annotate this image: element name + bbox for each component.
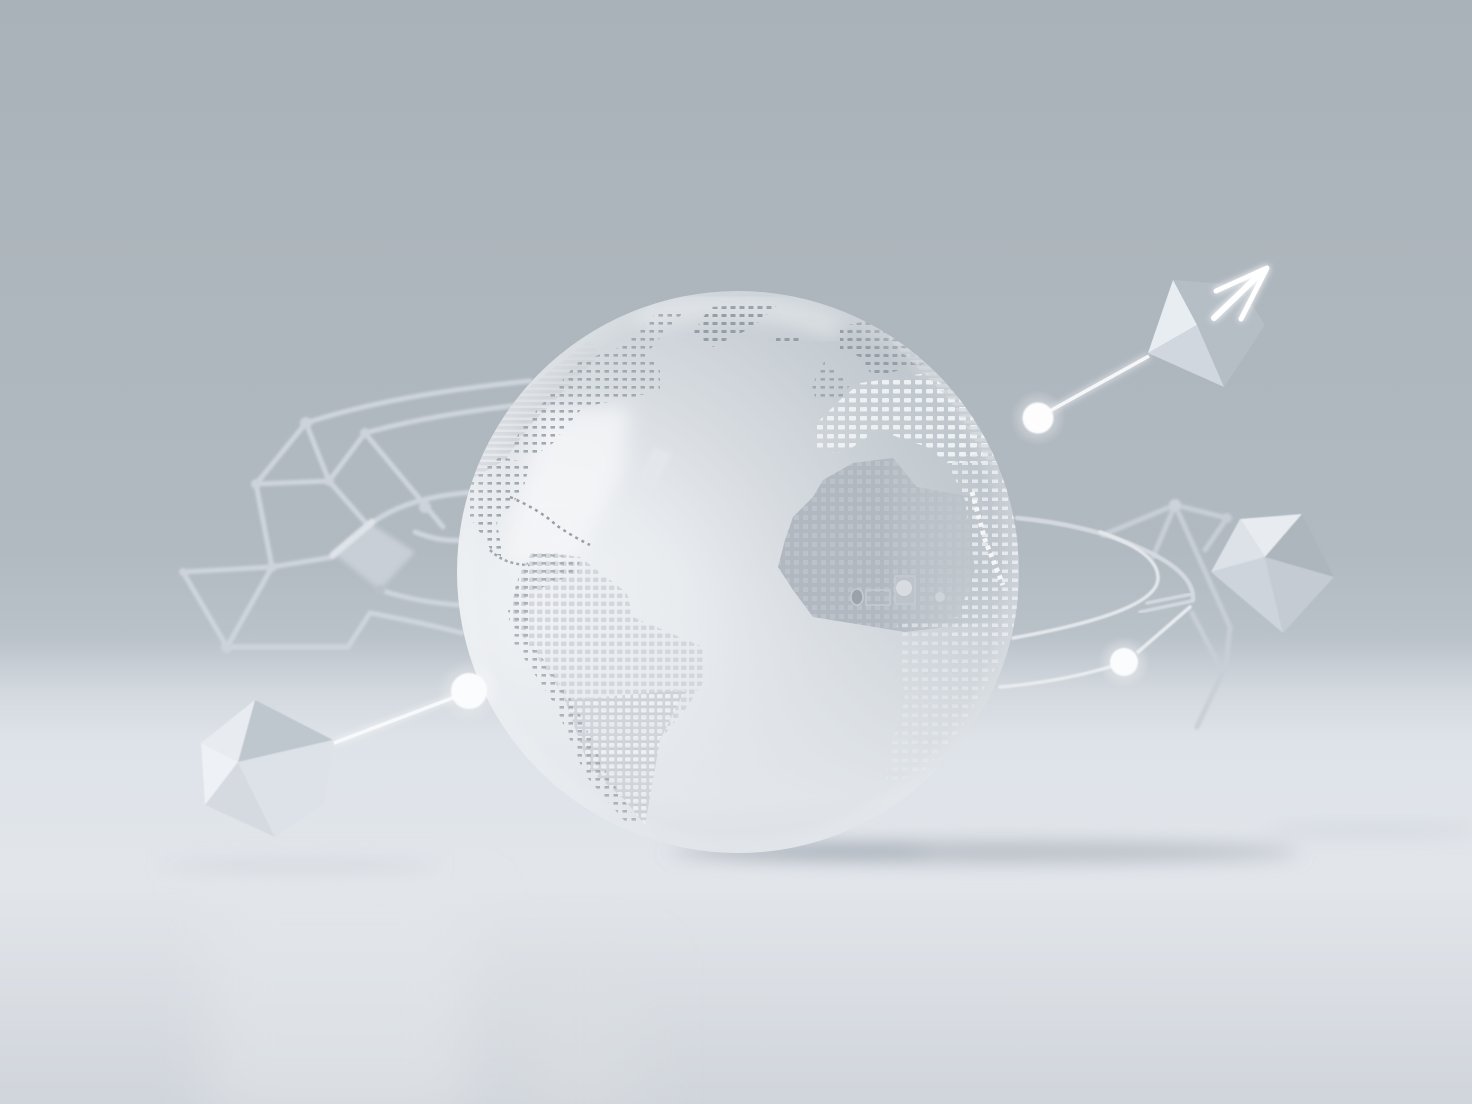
globe shadow on floor [160,826,1472,870]
circuit details [851,576,945,605]
central america [490,550,530,565]
north america [510,310,683,457]
circuit chip [895,576,915,604]
south america lower bright dots [565,690,685,825]
top highlight band [640,308,840,330]
window reflection [527,404,630,528]
africa body [778,458,964,632]
blurred polyhedron behind wireframe [333,523,415,590]
globe [457,291,1019,855]
rim light [457,291,1019,853]
southern africa [897,617,1004,734]
latitude stripes left [474,385,566,478]
floor reflections [210,900,640,1104]
polyhedron: upper right with arrow [1148,280,1265,387]
arrow [1214,268,1267,319]
lower sphere lightening [729,623,1010,853]
caribbean chain [510,497,590,545]
connector: lower left line and node [334,659,501,743]
polyhedron: lower left [201,700,333,837]
left wireframe network [179,381,530,653]
globe sphere [457,291,1019,853]
western coast [470,457,530,557]
europe [817,373,1000,463]
circuit oval [851,589,863,605]
east africa and arabia [945,450,1019,640]
horn coast [972,492,1003,585]
scandinavia and russia [840,322,924,373]
connector: upper right line and node [1010,356,1149,446]
south america [510,554,702,742]
south america west coast [508,552,640,825]
right wireframe rings and struts [1000,499,1232,727]
greenland [694,306,776,347]
right rim stripes [889,336,998,465]
small island [776,338,798,341]
small glare [637,447,672,487]
polyhedron: right [1211,514,1334,633]
node: right ring light [1098,636,1150,688]
